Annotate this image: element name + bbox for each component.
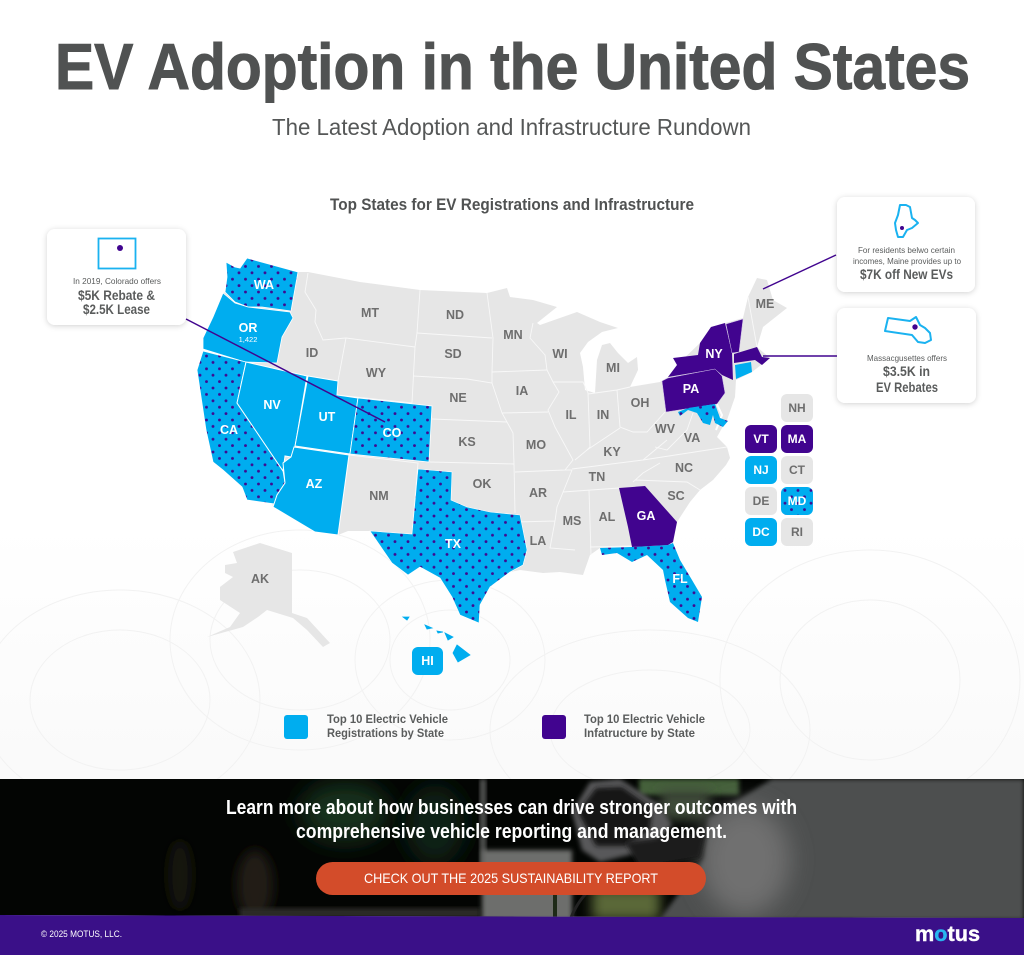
state: New York <box>668 323 733 380</box>
state labels: gray <box>251 297 774 586</box>
state labels: white: FL <box>672 572 688 586</box>
tile NJ <box>745 456 777 484</box>
state labels: gray: WI <box>552 347 568 361</box>
callout text <box>853 245 961 282</box>
state labels: gray: VA <box>684 431 700 445</box>
button <box>316 862 706 895</box>
tile MD <box>781 487 813 515</box>
state labels: gray: MI <box>606 361 620 375</box>
state labels: white: TX <box>445 537 462 551</box>
state labels: white: OR <box>239 321 257 335</box>
tile MA <box>781 425 813 453</box>
state labels: gray: OH <box>631 396 649 410</box>
state labels: white: WA <box>254 278 274 292</box>
callout: Maine <box>837 197 975 292</box>
state labels: gray: MS <box>563 514 581 528</box>
state: Vermont <box>726 319 743 353</box>
banner text: comprehensive vehicle reporting and management. <box>296 821 727 843</box>
icon: Massachusetts outline <box>885 317 931 343</box>
tile CT <box>781 456 813 484</box>
banner photo <box>0 779 1024 920</box>
callout text: $5K Rebate & <box>78 288 155 303</box>
state: Massachusetts <box>734 347 770 365</box>
map of the United States <box>197 258 787 675</box>
banner text <box>226 797 797 843</box>
legend item: infrastructure: Infatructure by State <box>584 726 695 740</box>
tile NH: NH <box>788 401 806 415</box>
state labels: gray: AK <box>251 572 269 586</box>
callout text <box>867 353 947 395</box>
legend item: registrations <box>284 712 448 740</box>
tile RI <box>781 518 813 546</box>
state labels: white: NV <box>263 398 281 412</box>
state labels: white: PA <box>683 382 699 396</box>
state: Washington <box>225 258 298 311</box>
tile NH <box>781 394 813 422</box>
state labels: gray: ID <box>306 346 318 360</box>
state labels: gray: NM <box>369 489 389 503</box>
state: Florida <box>600 543 702 622</box>
state labels: gray: NE <box>449 391 467 405</box>
connector: Colorado <box>186 319 385 422</box>
state labels: gray: ND <box>446 308 464 322</box>
callout text: EV Rebates <box>876 379 938 395</box>
state labels: white: UT <box>319 410 336 424</box>
state labels: gray: MT <box>361 306 379 320</box>
tile DC: DC <box>752 525 770 539</box>
state: Maryland <box>678 404 728 427</box>
banner text: Learn more about how businesses can drive stronger outcomes with <box>226 797 797 819</box>
state labels: gray: OK <box>473 477 491 491</box>
state: Connecticut <box>735 362 752 379</box>
Oregon value: 1,422 <box>239 335 257 344</box>
state: Oregon <box>203 293 293 363</box>
callout text <box>73 276 161 317</box>
tile DE: DE <box>753 494 769 508</box>
state labels: white <box>220 278 723 586</box>
call to action banner <box>0 779 1024 920</box>
logo: motus <box>915 923 980 946</box>
state: Utah <box>295 376 358 454</box>
state labels: white: GA <box>637 509 655 523</box>
copyright: © 2025 MOTUS, LLC. <box>41 929 122 939</box>
state: Georgia <box>619 486 677 547</box>
legend item: registrations: Registrations by State <box>327 726 444 740</box>
state labels: gray: MN <box>503 328 523 342</box>
state labels: white: AZ <box>306 477 323 491</box>
icon: Maine outline <box>895 205 918 237</box>
state labels: gray: TN <box>589 470 605 484</box>
connector: Massachusetts <box>763 355 837 357</box>
state: Nevada <box>237 362 307 471</box>
state: Texas <box>370 469 527 623</box>
state labels: white: CA <box>220 423 238 437</box>
callout text: Massacgusettes offers <box>867 353 947 363</box>
state labels: gray: WY <box>366 366 387 380</box>
state: Pennsylvania <box>662 369 725 412</box>
state labels: gray: KS <box>458 435 476 449</box>
small northeast state tiles <box>745 394 813 546</box>
state labels: gray: LA <box>530 534 546 548</box>
tile CT: CT <box>789 463 806 477</box>
subtitle: The Latest Adoption and Infrastructure Rundown <box>272 114 751 140</box>
tile DE <box>745 487 777 515</box>
icon: Colorado outline <box>98 238 136 268</box>
state labels: gray: KY <box>603 445 621 459</box>
state labels: gray: IA <box>516 384 528 398</box>
state labels: gray: WV <box>655 422 676 436</box>
Hawaii tile: HI <box>421 654 434 668</box>
callout text: In 2019, Colorado offers <box>73 276 161 286</box>
callout text: $2.5K Lease <box>83 302 150 317</box>
tile NJ: NJ <box>753 463 769 477</box>
legend item: infrastructure <box>542 712 705 740</box>
map heading: Top States for EV Registrations and Infrastructure <box>330 195 694 214</box>
tile VT: VT <box>753 432 769 446</box>
connector: Maine <box>763 255 836 289</box>
callout: Colorado <box>47 229 186 325</box>
callout text: $3.5K in <box>883 363 930 379</box>
state: Alaska <box>207 543 330 647</box>
state labels: gray: AR <box>529 486 547 500</box>
legend <box>284 712 705 740</box>
state labels: gray: AL <box>599 510 616 524</box>
callout: Massachusetts <box>837 308 976 403</box>
state labels: gray: ME <box>756 297 774 311</box>
callout text: For residents belwo certain <box>858 245 955 255</box>
state: California <box>197 351 285 504</box>
state: Arizona <box>273 447 349 535</box>
button: CHECK OUT THE 2025 SUSTAINABILITY REPORT <box>364 870 658 886</box>
state: Colorado <box>350 398 432 462</box>
tile RI: RI <box>791 525 803 539</box>
tile MA: MA <box>788 432 807 446</box>
state labels: gray: MO <box>526 438 546 452</box>
tile DC <box>745 518 777 546</box>
state labels: white: NY <box>705 347 723 361</box>
callout text: incomes, Maine provides up to <box>853 256 961 266</box>
state labels: gray: IN <box>597 408 609 422</box>
state labels: gray: SD <box>444 347 462 361</box>
callout text: $7K off New EVs <box>860 266 953 282</box>
state labels: gray: IL <box>565 408 577 422</box>
state labels: gray: NC <box>675 461 693 475</box>
footer bar <box>0 915 1024 955</box>
tile MD: MD <box>788 494 807 508</box>
state: Hawaii islands <box>403 617 470 662</box>
legend item: registrations: Top 10 Electric Vehicle <box>327 712 448 726</box>
legend item: infrastructure: Top 10 Electric Vehicle <box>584 712 705 726</box>
tile VT <box>745 425 777 453</box>
non-highlighted contiguous states <box>203 272 787 575</box>
state labels: gray: SC <box>667 489 685 503</box>
Hawaii tile <box>412 647 443 675</box>
state labels: white: CO <box>383 426 402 440</box>
